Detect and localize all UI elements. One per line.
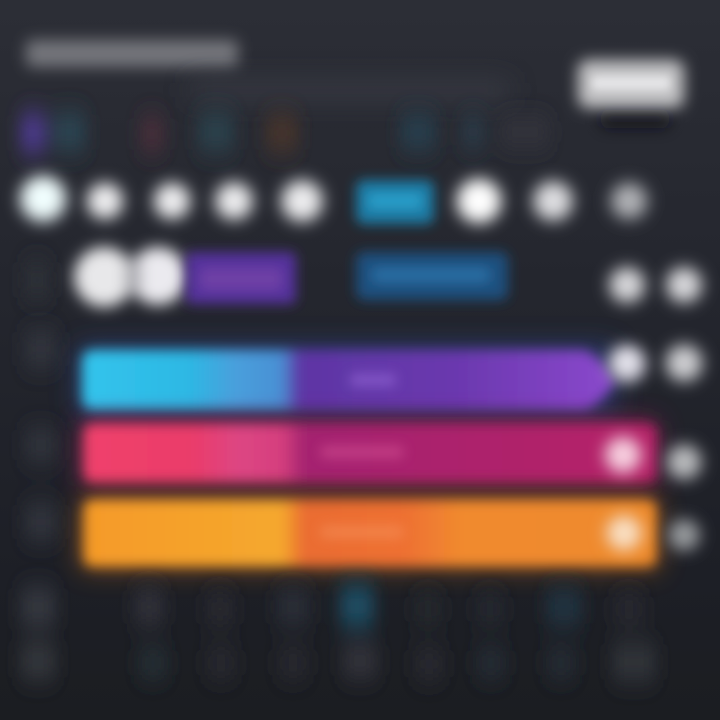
- marker pink bar outer: [664, 442, 704, 482]
- row label: [24, 262, 50, 298]
- marker orange bar outer: [666, 517, 702, 553]
- bar: orange: [80, 498, 660, 570]
- bar: blue to purple: [76, 344, 616, 416]
- avatar group: [74, 247, 187, 307]
- row labels left: [24, 332, 58, 539]
- marker pink bar: [603, 435, 643, 475]
- avatar right 1: [606, 264, 648, 306]
- avatar 8: [607, 179, 651, 223]
- avatar 1: [18, 174, 68, 224]
- marker blue bar: [607, 344, 647, 384]
- avatar 2: [84, 180, 126, 222]
- action button: [578, 60, 684, 128]
- marker orange bar: [604, 513, 644, 553]
- avatar 7: [530, 178, 576, 224]
- blue pill: [356, 252, 508, 300]
- status pill: [356, 180, 434, 224]
- avatar 6: [454, 176, 504, 226]
- bar end markers: [603, 342, 705, 553]
- bar: pink to magenta: [80, 420, 658, 486]
- row two: avatars and pills: [24, 247, 705, 307]
- marker blue bar outer: [663, 342, 705, 384]
- footer grid: [20, 586, 656, 680]
- avatar 3: [151, 180, 193, 222]
- filter tabs: [20, 114, 550, 152]
- purple pill: [186, 252, 296, 304]
- row of avatars and status pill: [18, 174, 651, 226]
- avatar 5: [278, 177, 326, 225]
- subtitle: [190, 80, 510, 100]
- avatar 4: [212, 179, 256, 223]
- title: [26, 40, 238, 67]
- avatar right 2: [663, 264, 705, 306]
